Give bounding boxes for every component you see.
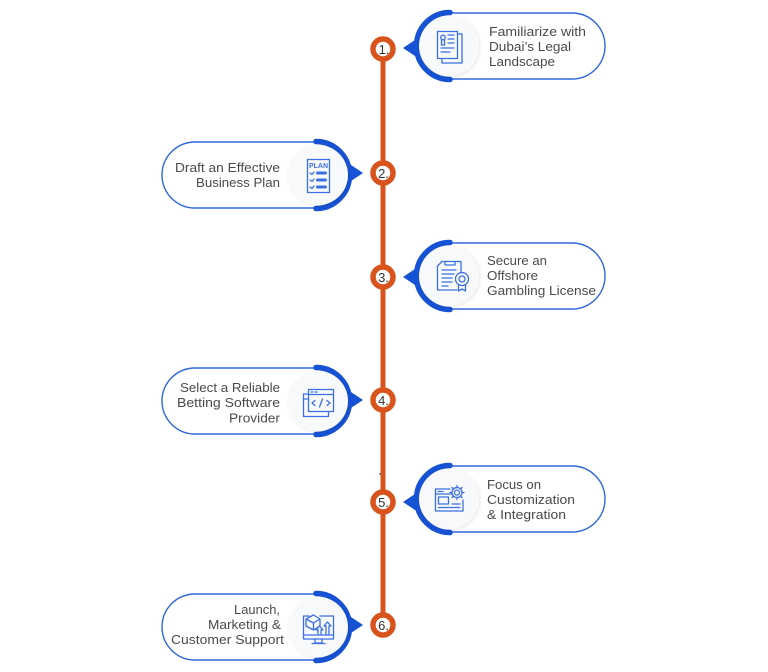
- icon: launch monitor: [304, 615, 334, 644]
- step 3 text: [487, 253, 596, 298]
- step 2 number: [373, 163, 393, 183]
- step 4 panel: [162, 368, 393, 434]
- step 1 text: Landscape: [489, 54, 555, 69]
- icon: software code windows: [304, 390, 334, 416]
- icon: business plan: PLAN: [309, 163, 328, 170]
- step 1 text: [489, 24, 586, 69]
- step 3 text: Secure an: [487, 253, 547, 268]
- icon: legal documents: [438, 32, 462, 63]
- icon: license certificate: [438, 262, 468, 291]
- step 1 number: 1.: [379, 42, 389, 57]
- step 5 text: Focus on: [487, 477, 541, 492]
- step 6 text: [171, 602, 284, 647]
- step 3 panel: [373, 242, 605, 310]
- step 3 number: [373, 267, 393, 287]
- step 5 text: [487, 477, 575, 522]
- step 5 card shape: [403, 466, 605, 532]
- step 3 text: Offshore: [487, 268, 538, 283]
- step 6 text: Customer Support: [171, 632, 284, 647]
- step 4 number: 4.: [378, 393, 389, 408]
- step 2 text: Business Plan: [196, 175, 280, 190]
- step 1 panel: [373, 12, 605, 80]
- step 5 number: 5.: [378, 495, 389, 510]
- step 1 text: Familiarize with: [489, 24, 586, 39]
- step 5 text: Customization: [487, 492, 575, 507]
- step 2 number: 2.: [378, 166, 389, 181]
- step 5 panel: [373, 466, 605, 532]
- step 2 panel: [162, 142, 393, 208]
- step 1 number: [373, 39, 393, 59]
- step 6 text: Marketing &: [208, 617, 281, 632]
- step 4 text: [177, 380, 281, 426]
- step 5 number: [373, 492, 393, 512]
- step 1 card shape: [403, 12, 605, 80]
- step 4 text: Provider: [229, 410, 281, 426]
- step 2 text: [175, 160, 280, 190]
- step 5 text: & Integration: [487, 507, 566, 522]
- step 2 text: Draft an Effective: [175, 160, 280, 175]
- step 4 number: [373, 390, 393, 410]
- step 3 card shape: [403, 242, 605, 310]
- step 4 card shape: [162, 368, 363, 434]
- step 4 text: Select a Reliable: [180, 380, 280, 395]
- step 2 card shape: [162, 142, 363, 208]
- step 6 card shape: [162, 594, 363, 660]
- step 1 text: Dubai’s Legal: [489, 39, 571, 54]
- step 6 number: 6.: [378, 618, 389, 633]
- icon: customization gear: [436, 486, 464, 511]
- step 6 text: Launch,: [234, 602, 280, 617]
- step 4 text: Betting Software: [177, 395, 280, 410]
- step 3 text: Gambling License: [487, 283, 596, 298]
- step 3 number: 3.: [378, 270, 389, 285]
- step 6 number: [373, 615, 393, 635]
- icon: business plan: [308, 160, 330, 192]
- step 6 panel: [162, 594, 393, 660]
- timeline line: [380, 49, 386, 625]
